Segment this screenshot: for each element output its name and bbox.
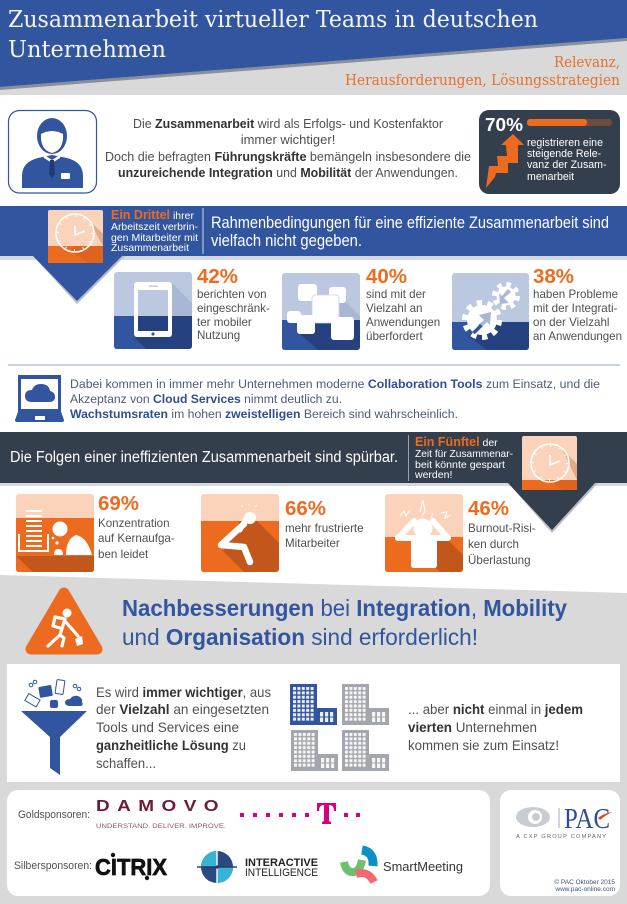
callout text: Ein Drittel: [111, 208, 198, 254]
heading: improvements: und Organisation sind erforderlich!: [122, 624, 478, 650]
panel: 70 percent callout: steigende Rele-: [527, 148, 602, 160]
stat card: 38 percent integration: haben Probleme: [533, 288, 618, 301]
stat card: 40 percent applications: [282, 266, 440, 350]
callout text: Ein Drittel: Zusammenarbeit: [111, 242, 189, 254]
stat card: 38 percent integration: [452, 266, 622, 350]
intro text: Die Zusammenarbeit wird als Erfolgs- und Kostenfaktor: [133, 116, 444, 131]
logo: Damovo: UNDERSTAND. DELIVER. IMPROVE.: [96, 824, 226, 830]
label: silver sponsors: Silbersponsoren:: [14, 860, 92, 872]
text: not even every fourth company: [408, 701, 583, 753]
panel: 70 percent callout: 70%: [485, 115, 523, 135]
logo: PAC: A CXP GROUP COMPANY: [516, 834, 606, 840]
stat card: 66 percent frustrated: mehr frustrierte: [285, 522, 364, 535]
stat card: 40 percent applications: Anwendungen: [366, 316, 440, 329]
intro text: [105, 116, 471, 180]
text: holistic solution: der Vielzahl an eingesetzten: [96, 701, 269, 717]
stat card: 42 percent mobile: berichten von: [197, 288, 267, 301]
stat card: 46 percent burnout: ken durch: [468, 538, 519, 551]
banner heading: vielfach nicht gegeben.: [211, 232, 362, 250]
text: holistic solution: Tools und Services eine: [96, 719, 239, 735]
logo: Telekom: [240, 803, 360, 824]
icon: construction warning triangle: [31, 593, 97, 649]
logo: Damovo: DAMOVO: [96, 798, 226, 815]
stat card: 42 percent mobile: ter mobiler: [197, 316, 252, 329]
text: holistic solution: [96, 684, 271, 771]
panel: 70 percent callout: registrieren eine: [527, 137, 603, 149]
icon: smartphone: [114, 272, 192, 349]
stat card: 46 percent burnout: 46%: [468, 498, 509, 520]
copyright: [554, 878, 615, 893]
stat card: 69 percent concentration: Konzentration: [98, 517, 170, 530]
logo: PAC: PAC: [564, 804, 610, 835]
text: holistic solution: Es wird immer wichtiger, aus: [96, 684, 271, 700]
heading: improvements: [122, 595, 567, 650]
callout text: Ein Fünftel: werden!: [414, 469, 452, 481]
icon: laptop with cloud: [15, 375, 64, 422]
text: not even every fourth company: ... aber nicht einmal in jedem: [408, 701, 583, 717]
icon: person under stress: [385, 494, 463, 572]
stat card: 69 percent concentration: auf Kernaufga-: [98, 532, 175, 545]
stat card: 40 percent applications: 40%: [366, 266, 407, 288]
stat card: 42 percent mobile: [114, 266, 270, 349]
text: not even every fourth company: kommen sie zum Einsatz!: [408, 737, 559, 753]
text: not even every fourth company: vierten Unternehmen: [408, 719, 537, 735]
collaboration tools text: Akzeptanz von Cloud Services nimmt deutlich zu.: [70, 392, 342, 406]
stat card: 66 percent frustrated: [201, 494, 364, 572]
panel: PAC publisher: [500, 790, 620, 896]
panel: 70 percent callout: vanz der Zusam-: [527, 159, 607, 171]
panel: gray lower section: [0, 575, 627, 904]
stat card: 38 percent integration: mit der Integrati-: [533, 302, 618, 315]
subtitle first line: Relevanz,: [554, 55, 620, 71]
stat card: 42 percent mobile: 42%: [197, 266, 238, 288]
callout text: Ein Drittel: Ein Drittel ihrer: [111, 208, 194, 222]
icon: desk worker: [16, 494, 94, 572]
intro text: immer wichtiger!: [241, 132, 335, 147]
logo: SmartMeeting: SmartMeeting: [383, 859, 463, 874]
collaboration tools text: [70, 377, 600, 421]
text: holistic solution: ganzheitliche Lösung zu: [96, 737, 246, 753]
logo: PAC: [516, 804, 612, 840]
label: gold sponsors: Goldsponsoren:: [18, 809, 90, 821]
callout text: Ein Drittel: gen Mitarbeiter mit: [111, 232, 198, 244]
logo: Interactive Intelligence: [197, 851, 318, 883]
stat card: 40 percent applications: überfordert: [366, 330, 423, 343]
stat card: 66 percent frustrated: Mitarbeiter: [285, 537, 340, 550]
stat card: 38 percent integration: on der Vielzahl: [533, 316, 610, 329]
panel: 70 percent callout: menarbeit: [527, 171, 574, 183]
stat card: 42 percent mobile: eingeschränk-: [197, 302, 270, 315]
icon: clock: [522, 436, 577, 490]
callout text: Ein Fünftel: Ein Fünftel der: [415, 435, 498, 449]
icon: manager portrait: [8, 110, 96, 193]
stat card: 40 percent applications: sind mit der: [366, 288, 426, 301]
intro text: Doch die befragten Führungskräfte bemängeln insbesondere die: [105, 149, 471, 164]
stat card: 66 percent frustrated: 66%: [285, 498, 326, 520]
callout text: Ein Fünftel: Zeit für Zusammenar-: [415, 448, 513, 460]
icon: four company buildings: [290, 684, 389, 771]
stat card: 69 percent concentration: 69%: [98, 493, 139, 515]
logo: Damovo: [96, 798, 226, 830]
intro text: unzureichende Integration und Mobilität der Anwendungen.: [118, 165, 458, 180]
icon: gears: [452, 273, 529, 350]
title: Zusammenarbeit virtueller Teams in deutschen: [8, 7, 538, 33]
stat card: 46 percent burnout: Überlastung: [468, 554, 531, 567]
panel: solutions: [7, 664, 620, 782]
heading: improvements: Nachbesserungen bei Integration, Mobility: [122, 595, 567, 621]
header banner: [0, 0, 627, 95]
logo: Interactive Intelligence: INTERACTIVE: [245, 857, 318, 869]
collaboration tools text: Wachstumsraten im hohen zweistelligen Bereich sind wahrscheinlich.: [70, 407, 458, 421]
stat card: 40 percent applications: Vielzahl an: [366, 302, 423, 315]
text: holistic solution: schaffen...: [96, 755, 156, 771]
callout text: Ein Fünftel: beit könnte gespart: [415, 459, 505, 471]
panel: blue banner: [0, 206, 627, 304]
banner heading: [211, 214, 609, 250]
logo: Citrix: CITRIX: [95, 854, 167, 880]
icon: application tiles: [282, 273, 360, 350]
panel: 70 percent callout: [479, 110, 620, 194]
logo: Interactive Intelligence: INTELLIGENCE: [245, 867, 318, 879]
callout text: Ein Drittel: Arbeitszeit verbrin-: [111, 221, 198, 233]
stat card: 46 percent burnout: Burnout-Risi-: [468, 522, 536, 535]
stat card: 69 percent concentration: [16, 493, 175, 572]
stat card: 69 percent concentration: ben leidet: [98, 548, 149, 561]
stat card: 38 percent integration: an Anwendungen: [533, 330, 622, 343]
collaboration tools text: Dabei kommen in immer mehr Unternehmen moderne Collaboration Tools zum Einsatz, und die: [70, 377, 600, 391]
logo: SmartMeeting: [344, 850, 463, 882]
stat card: 38 percent integration: 38%: [533, 266, 574, 288]
title second line: Unternehmen: [8, 37, 166, 63]
panel: sponsors: [7, 790, 490, 896]
icon: frustrated seated person: [201, 494, 279, 572]
stat card: 42 percent mobile: Nutzung: [197, 329, 240, 342]
panel: dark banner: [0, 432, 627, 533]
copyright: www.pac-online.com: [554, 886, 615, 893]
callout text: Ein Fünftel: [414, 435, 513, 481]
icon: funnel with tools: [21, 680, 87, 775]
copyright: © PAC Oktober 2015: [554, 878, 615, 886]
stat card: 46 percent burnout: [385, 494, 536, 572]
banner heading: Die Folgen einer ineffizienten Zusammenarbeit sind spürbar.: [10, 449, 398, 466]
icon: clock: [48, 210, 103, 263]
